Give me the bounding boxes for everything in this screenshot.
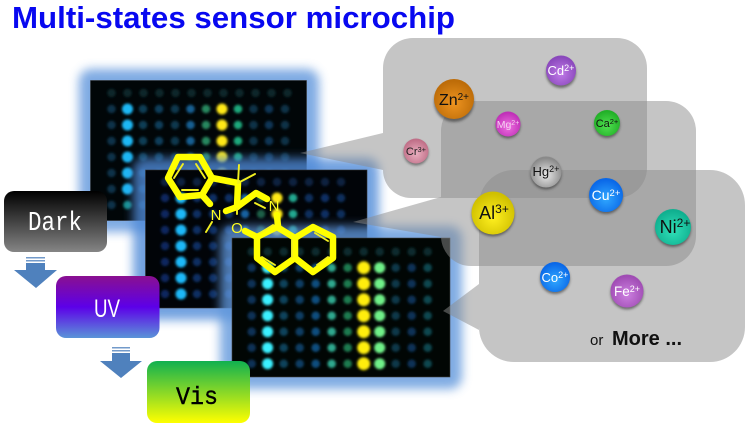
ion: Zn2+: 2+ bbox=[458, 92, 469, 103]
ion: Zn2+ bbox=[434, 79, 474, 122]
state box: Vis bbox=[147, 361, 250, 423]
callout: speech bubble 2 bbox=[353, 101, 696, 266]
ion: Al3+ bbox=[472, 192, 514, 236]
ion: Mg2+: 2+ bbox=[511, 120, 519, 127]
state box: UV: UV bbox=[94, 295, 120, 323]
ion: Cr3+ bbox=[404, 138, 428, 166]
ion: Cu2+: Cu bbox=[592, 187, 610, 203]
molecule: spiropyran structure: N bbox=[211, 207, 221, 224]
ion: Cu2+: 2+ bbox=[610, 188, 621, 199]
panel: microchip plate 2 (UV state) bbox=[133, 158, 379, 320]
ion: Zn2+: Zn bbox=[439, 92, 458, 109]
state box: Dark bbox=[4, 191, 107, 252]
state box: Vis: Vis bbox=[176, 383, 218, 412]
ion: Cd2+: Cd bbox=[548, 63, 564, 78]
callout: speech bubble 1 bbox=[300, 38, 647, 198]
ion: Ni2+: 2+ bbox=[677, 216, 690, 230]
callout: speech bubble 3 bbox=[443, 170, 745, 362]
text: or More: More ... bbox=[612, 328, 682, 350]
ion: Al3+: 3+ bbox=[495, 202, 509, 216]
ion: Cr3+: 3+ bbox=[418, 145, 427, 154]
ion: Ca2+: 2+ bbox=[610, 117, 619, 126]
molecule: spiropyran structure: O bbox=[231, 220, 243, 237]
ion: Fe2+: Fe bbox=[614, 284, 630, 299]
panel: microchip plate 3 (visible state) bbox=[220, 226, 462, 389]
ion: Mg2+: Mg bbox=[497, 119, 511, 131]
ion: Ca2+: Ca bbox=[596, 118, 610, 130]
ion: Cr3+: Cr bbox=[406, 146, 418, 158]
ion: Hg2+: 2+ bbox=[549, 164, 559, 174]
ion: Mg2+ bbox=[496, 112, 520, 138]
ion: Co2+: Co bbox=[542, 270, 558, 285]
ion: Ni2+ bbox=[655, 209, 691, 247]
ion: Cd2+ bbox=[546, 56, 576, 88]
title: Multi-states sensor microchip bbox=[12, 1, 455, 35]
ion: Al3+: Al bbox=[479, 203, 495, 223]
arrow: UV to Vis bbox=[100, 347, 142, 378]
state box: Dark: Dark bbox=[28, 209, 82, 239]
ion: Hg2+: Hg bbox=[533, 164, 549, 179]
molecule: spiropyran structure bbox=[168, 157, 333, 272]
ion: Ni2+: Ni bbox=[660, 217, 677, 237]
ion: Hg2+ bbox=[530, 156, 562, 190]
ion: Co2+ bbox=[540, 262, 570, 294]
ion: Cd2+: 2+ bbox=[564, 63, 574, 73]
state box: UV bbox=[56, 276, 160, 338]
ion: Co2+: 2+ bbox=[558, 270, 568, 280]
molecule: spiropyran structure: N bbox=[269, 198, 279, 215]
text: or More: or bbox=[590, 332, 603, 349]
ion: Fe2+ bbox=[610, 274, 644, 310]
ion: Cu2+ bbox=[589, 178, 623, 214]
ion: Ca2+ bbox=[594, 110, 620, 138]
arrow: Dark to UV bbox=[14, 257, 57, 288]
panel: microchip plate 1 (dark state) bbox=[79, 69, 319, 232]
ion: Fe2+: 2+ bbox=[630, 284, 640, 294]
